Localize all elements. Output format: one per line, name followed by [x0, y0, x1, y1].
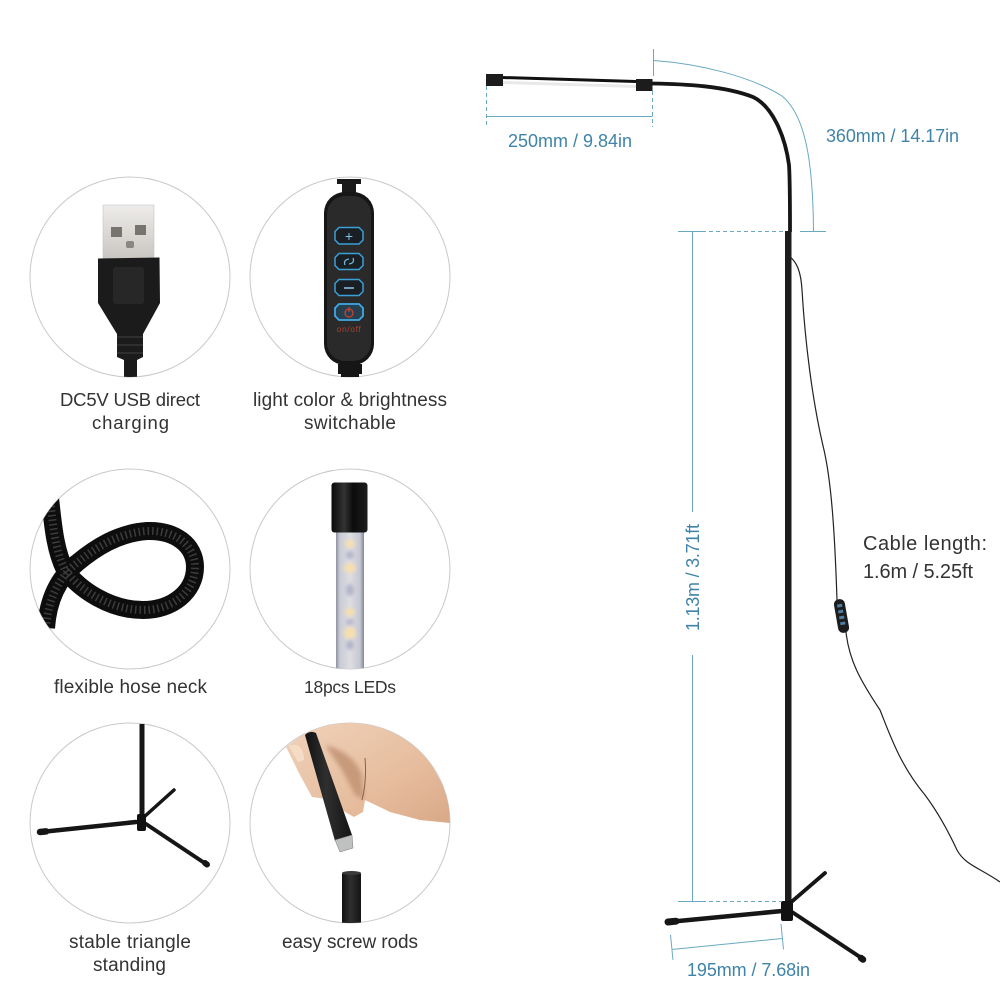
inline remote on cable	[833, 598, 850, 634]
icon: LED tube	[332, 482, 368, 670]
gooseneck	[652, 84, 790, 232]
panel: tripod detail	[30, 723, 230, 923]
panel: LEDs	[250, 469, 450, 670]
icon: tripod base	[40, 724, 207, 864]
panel: USB charging	[30, 177, 230, 380]
panel: flexible hose	[30, 469, 230, 669]
icon: gooseneck loop	[46, 498, 195, 628]
tripod base	[668, 873, 863, 960]
dimension: gooseneck length: 360mm / 14.17in	[826, 126, 959, 146]
icon: inline remote: +	[345, 228, 353, 244]
caption: flexible hose: flexible hose neck	[54, 677, 208, 698]
dimension: gooseneck length	[654, 49, 959, 232]
caption: dimmer switch: switchable	[304, 413, 396, 434]
dimension: pole height	[678, 232, 786, 902]
panel: screw rods	[250, 722, 450, 928]
icon: inline remote: on/off	[337, 324, 361, 334]
caption: tripod detail: standing	[93, 955, 166, 976]
panel: dimmer switch	[250, 177, 450, 377]
lamp head	[486, 74, 652, 91]
caption: USB charging: DC5V USB direct	[60, 389, 200, 410]
dimension: leg length: 195mm / 7.68in	[687, 960, 810, 980]
power cable	[789, 256, 1000, 882]
icon: inline remote	[324, 179, 374, 377]
dimension: head width: 250mm / 9.84in	[508, 131, 632, 151]
caption: dimmer switch: light color & brightness	[253, 390, 447, 411]
caption: tripod detail: stable triangle	[69, 932, 191, 953]
dimension: pole height: 1.13m / 3.71ft	[683, 524, 703, 631]
icon: hand holding rod	[286, 722, 450, 928]
caption: screw rods: easy screw rods	[282, 932, 418, 953]
dimension: leg length	[670, 924, 810, 980]
dimension: head width	[486, 86, 652, 151]
cable length label: Cable length:	[863, 533, 987, 555]
caption: LEDs: 18pcs LEDs	[304, 677, 396, 697]
cable length label: 1.6m / 5.25ft	[863, 561, 973, 583]
caption: USB charging: charging	[92, 412, 169, 433]
icon: USB plug	[98, 205, 160, 380]
pole	[785, 231, 792, 903]
floor lamp	[486, 74, 1000, 960]
